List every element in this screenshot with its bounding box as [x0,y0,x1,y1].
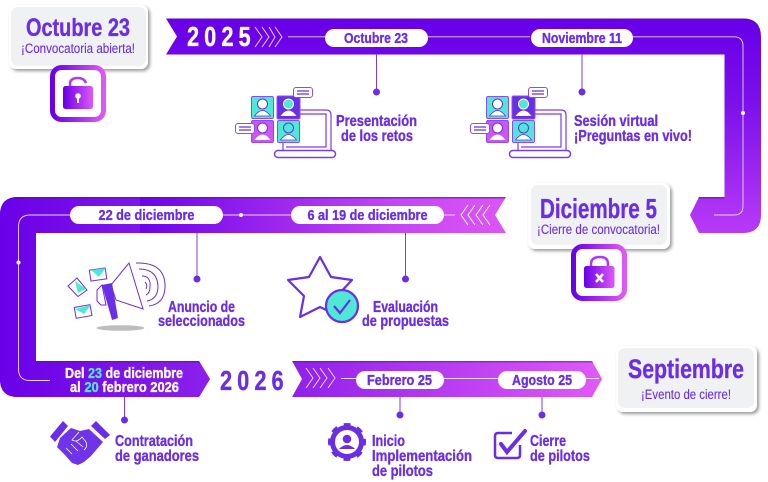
ribbon label: Del 23 de diciembre al 20 febrero 2026: Del 23 de diciembre [65,366,183,382]
pill: 22 de diciembre [70,206,223,224]
pill: Noviembre 11: Noviembre 11 [542,31,622,47]
icon: video call sesion virtual [470,88,570,158]
text: Cierre de pilotos: de pilotos [530,448,590,465]
text: Contratación de ganadores [115,433,199,465]
text: Evaluación de propuestas: de propuestas [362,313,449,330]
text: Inicio Implementación de pilotos: Implementación [372,448,472,465]
text: Sesión virtual: ¡Preguntas en vivo! [574,128,692,145]
text: Inicio Implementación de pilotos: Inicio [372,433,405,450]
year 2026: 2026 [220,365,284,397]
ribbon label: Del 23 de diciembre al 20 febrero 2026: al 20 febrero 2026 [70,380,179,396]
text: Sesión virtual: Sesión virtual [574,113,658,130]
text: Inicio Implementación de pilotos [372,433,472,480]
text: Contratación de ganadores: de ganadores [115,448,199,465]
callout: Septiembre: ¡Evento de cierre! [641,387,731,402]
text: Evaluación de propuestas: Evaluación [373,299,438,316]
connector lines on ribbons [18,37,743,381]
callout: Octubre 23: Octubre 23 [26,14,130,42]
text: Inicio Implementación de pilotos: de pilotos [372,463,433,480]
icon: video call presentacion [236,88,336,158]
pill: Octubre 23 [325,29,428,47]
ribbon 2 diciembre [0,197,506,397]
pill: Agosto 25: Agosto 25 [512,373,572,389]
callout: Diciembre 5: Diciembre 5 [540,193,657,224]
callout: Octubre 23 [9,5,148,69]
year 2025: 2025 [187,21,251,53]
chevrons diciembre [461,205,490,225]
text: Presentación de los retos [336,113,417,145]
ribbon 2026 [292,361,602,397]
icon: megaphone [68,263,165,331]
chevrons 2025 [255,27,282,47]
callout: Diciembre 5 [528,183,670,249]
text: Anuncio de seleccionados: Anuncio de [168,299,235,316]
pill: 22 de diciembre: 22 de diciembre [98,208,194,224]
text: Anuncio de seleccionados: seleccionados [158,313,245,330]
text: Sesión virtual [574,113,692,145]
text: Contratación de ganadores: Contratación [115,433,193,450]
callout: Octubre 23: ¡Convocatoria abierta! [21,41,135,56]
callout: Septiembre [616,346,757,412]
text: Presentación de los retos: Presentación [336,113,417,130]
text: Presentación de los retos: de los retos [341,128,413,145]
pill: Octubre 23: Octubre 23 [344,31,408,47]
text: Anuncio de seleccionados [158,299,245,330]
pill: Febrero 25: Febrero 25 [367,373,432,389]
ribbon label: Del 23 de diciembre al 20 febrero 2026 [65,366,183,396]
chevrons 2026 [306,368,335,388]
icon: closed lock [574,246,624,298]
icon: star with check [288,257,358,322]
icon: handshake [50,421,110,465]
text: Evaluación de propuestas [362,299,449,330]
top ribbon 2025 [166,18,761,233]
icon: open lock [52,68,104,120]
callout: Diciembre 5: ¡Cierre de convocatoria! [537,222,660,237]
text: Cierre de pilotos [530,433,590,465]
timeline stems and dots [121,54,586,424]
text: Cierre de pilotos: Cierre [530,433,566,450]
icon: checkbox [495,431,525,458]
pill: 6 al 19 de diciembre: 6 al 19 de diciembre [308,208,428,224]
icon: gear with person [330,425,364,459]
